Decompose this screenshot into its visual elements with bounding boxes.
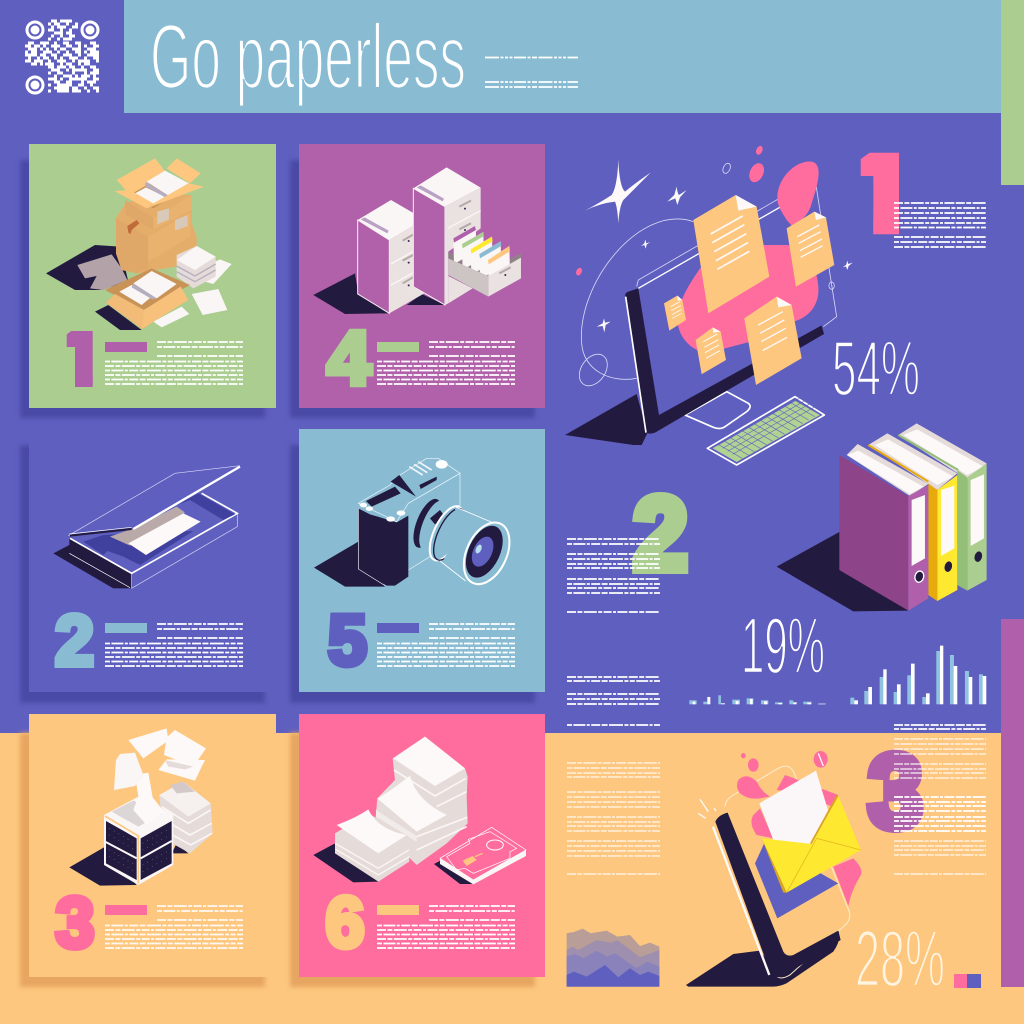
panel 4: filing cabinets <box>299 144 545 408</box>
accent bar <box>105 623 147 633</box>
left text lines on peach <box>567 763 660 874</box>
accent bar <box>105 905 147 915</box>
yellow envelope <box>762 795 861 893</box>
monitor frame <box>625 288 824 434</box>
number 6: 6 <box>326 884 364 963</box>
section 1 numeral: 1 <box>857 131 913 254</box>
percentage 28%: 28% <box>855 914 945 1003</box>
number 5: 5 <box>328 602 367 681</box>
accent bar <box>377 905 419 915</box>
illustration: binders <box>689 423 987 704</box>
orbit and decorative outlines <box>574 162 837 391</box>
number 3: 3 <box>56 884 94 963</box>
panel 1: boxes <box>29 144 276 408</box>
illustration: computer with documents <box>565 145 853 465</box>
percentage 19%: 19% <box>741 601 825 690</box>
illustration: phone and area chart <box>567 751 861 987</box>
icon: filing cabinets <box>313 167 521 314</box>
icon: paper shredder <box>69 728 213 886</box>
document lower <box>744 297 802 385</box>
icon: camera <box>314 458 519 591</box>
document small <box>696 327 726 374</box>
panel 3: shredder <box>29 714 276 977</box>
accent bar <box>377 623 419 633</box>
accent bar <box>105 342 147 352</box>
yellow binder <box>868 433 957 601</box>
binder shadow <box>777 532 908 611</box>
keyboard <box>707 397 824 465</box>
section 2 numeral: 2 <box>634 476 688 591</box>
letter <box>759 771 830 844</box>
section 1 text lines <box>894 203 986 247</box>
pink blob main <box>677 245 818 353</box>
QR code <box>25 21 99 93</box>
blue sheet <box>755 842 838 918</box>
sparkles <box>585 159 853 332</box>
document tiny <box>664 296 686 331</box>
pink dots <box>575 145 767 276</box>
bar chart large <box>850 646 986 704</box>
right accent bar: green <box>1001 0 1024 185</box>
monitor shadow <box>565 394 647 445</box>
number 4: 4 <box>327 316 371 401</box>
area chart <box>567 929 659 987</box>
title subtext lines <box>485 58 578 87</box>
section 2 text lines <box>567 539 660 725</box>
text lines <box>377 906 515 948</box>
bar chart small <box>689 695 826 704</box>
text lines <box>105 906 243 948</box>
header band <box>124 0 1001 113</box>
section 3 text lines <box>894 725 986 874</box>
percentage 54%: 54% <box>832 324 920 412</box>
purple binder <box>839 444 928 611</box>
document large <box>693 195 769 313</box>
text lines <box>377 342 515 384</box>
text lines <box>105 342 243 384</box>
legend squares <box>954 974 981 988</box>
pink blob upper <box>777 162 819 227</box>
phone body <box>715 813 841 977</box>
phone shadow <box>686 931 839 987</box>
accent bar <box>377 342 419 352</box>
phone outline <box>725 766 850 978</box>
document right <box>787 212 834 287</box>
card shadows <box>20 160 535 987</box>
burst marks <box>698 753 823 818</box>
number 2: 2 <box>55 602 94 681</box>
monitor stand <box>685 392 750 428</box>
panel 2: scanner <box>29 429 276 692</box>
icon: scanner <box>53 466 240 588</box>
section 3 numeral: 3 <box>868 734 922 849</box>
text lines <box>377 624 515 666</box>
right accent bar: purple <box>1001 619 1024 987</box>
title: Go paperless <box>150 6 466 108</box>
panel 5: camera <box>299 429 545 692</box>
pink blobs <box>737 751 861 906</box>
panel 6: paper stacks and hard drive <box>299 714 545 977</box>
green binder <box>898 423 987 591</box>
icon: cardboard boxes <box>46 158 232 330</box>
text lines <box>105 624 243 666</box>
number 1: 1 <box>65 316 101 400</box>
icon: paper stacks and hard drive <box>313 737 526 884</box>
